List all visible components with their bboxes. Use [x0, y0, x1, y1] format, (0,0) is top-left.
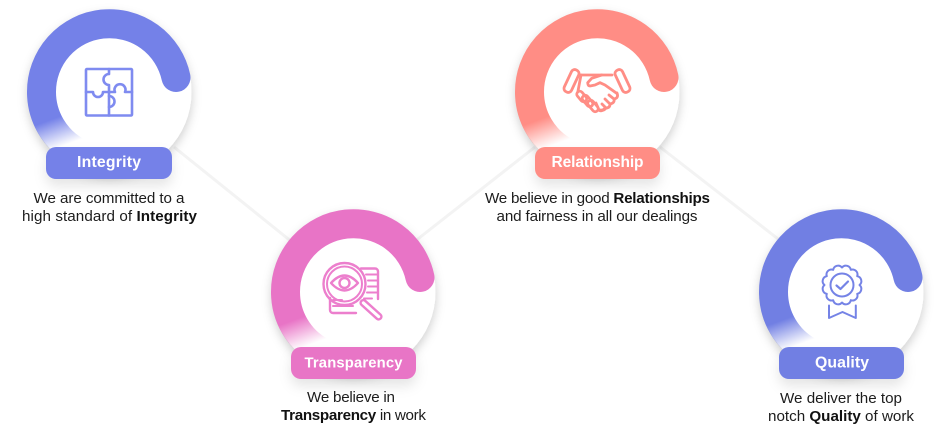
pill label: Integrity: Integrity: [77, 154, 141, 171]
icon: handshake: [563, 68, 631, 113]
pill label: Relationship: [535, 147, 660, 179]
pill label: Integrity: [46, 147, 172, 179]
ring: integrity: [41, 24, 176, 152]
description: integrity: [22, 190, 198, 225]
panel: integrity: [22, 10, 198, 225]
icon: magnifier over document: [324, 263, 383, 320]
pill label: Quality: [779, 347, 904, 379]
description: integrity: high standard of Integrity: [22, 208, 198, 225]
pill label: Transparency: [291, 347, 416, 379]
icon: puzzle: [86, 69, 132, 116]
ring: relationship: [529, 24, 664, 151]
pill label: Transparency: Transparency: [304, 356, 403, 372]
ring: quality: [773, 224, 908, 352]
description: quality: [768, 390, 914, 425]
panel: quality: [760, 210, 924, 425]
description: relationship: and fairness in all our dealings: [496, 208, 698, 225]
description: quality: We deliver the top: [780, 390, 902, 407]
description: transparency: [281, 389, 426, 424]
description: integrity: We are committed to a: [34, 190, 185, 207]
icon: award ribbon: [823, 266, 861, 318]
panel: transparency: [272, 210, 436, 424]
ring: transparency: [285, 224, 420, 352]
panel: relationship: [485, 10, 710, 225]
description: transparency: Transparency in work: [281, 407, 426, 424]
pill label: Quality: Quality: [815, 354, 869, 372]
pill label: Relationship: Relationship: [552, 154, 644, 171]
description: transparency: We believe in: [307, 389, 395, 406]
description: quality: notch Quality of work: [768, 408, 914, 425]
description: relationship: We believe in good Relationships: [485, 190, 710, 207]
description: relationship: [485, 190, 710, 225]
